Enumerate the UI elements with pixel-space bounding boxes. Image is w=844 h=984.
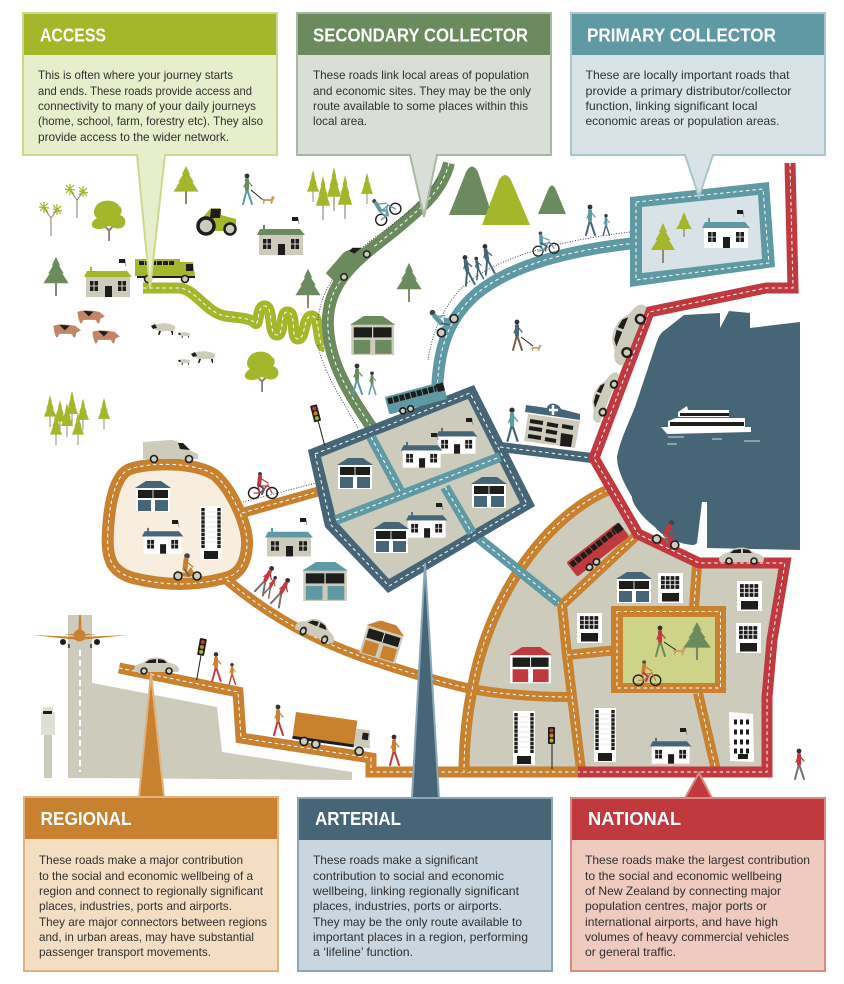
icon: red bus <box>566 522 631 579</box>
text block <box>39 853 267 959</box>
icon: person walking dog <box>513 320 542 351</box>
text block: to the social and economic wellbeing of a <box>39 869 253 883</box>
people and bikes <box>174 174 804 779</box>
icon: car <box>293 613 339 646</box>
panel: national <box>571 773 825 971</box>
road: secondary collector <box>318 163 449 428</box>
text block: important places in a region, performing <box>313 930 528 944</box>
text block: route available to some places within this <box>313 99 528 113</box>
text block: volumes of heavy commercial vehicles <box>585 930 789 944</box>
icon: parking building <box>200 506 222 560</box>
park with regional loop <box>611 606 726 693</box>
icon: lamb <box>178 332 190 338</box>
heading: NATIONAL <box>588 809 681 829</box>
road: access <box>143 288 325 347</box>
icon: cyclist red <box>248 472 278 498</box>
vehicles <box>134 208 764 757</box>
text block: wellbeing, linking regionally significant <box>312 884 520 898</box>
icon: pine cluster top <box>307 167 373 220</box>
icon: park tree <box>683 622 711 660</box>
text block: passenger transport movements. <box>39 945 211 959</box>
text block: places, industries, ports and airports. <box>39 899 232 913</box>
icon: office <box>577 613 602 643</box>
icon: traffic light <box>310 404 328 447</box>
icon: lime truck <box>135 259 195 282</box>
icon: pair orange <box>212 652 236 684</box>
text block <box>313 68 531 128</box>
icon: traffic light <box>193 638 207 681</box>
airport control tower <box>41 707 55 778</box>
text block: international airports, and have high <box>585 915 778 929</box>
icon: cyclist <box>364 189 403 228</box>
icon: house arterial <box>406 503 447 538</box>
icon: cow <box>92 330 120 343</box>
text block: These roads make the largest contribution <box>585 853 810 867</box>
icon: house primary <box>702 210 750 248</box>
icon: person walking dog <box>243 174 275 204</box>
roads: regional city network <box>464 490 716 772</box>
icon: red motorbike <box>652 516 686 550</box>
text block <box>586 68 792 128</box>
icon: tractor <box>198 208 236 234</box>
icon: pine lime <box>676 212 692 237</box>
text block: These roads make a significant <box>313 853 479 867</box>
traffic lights <box>193 404 555 769</box>
icon: plane <box>32 615 128 648</box>
text block: to the social and economic wellbeing <box>585 869 782 883</box>
icon: garage arterial <box>471 477 507 508</box>
icon: cyclist teal <box>530 229 560 257</box>
text block: region and connect to regionally significant <box>39 884 264 898</box>
road: regional ring with land <box>108 464 247 584</box>
road: arterial block with land <box>308 385 535 593</box>
icon: car <box>134 658 179 674</box>
icon: house national <box>650 728 691 764</box>
icon: pine lime <box>651 223 675 263</box>
text block: These roads link local areas of population <box>313 68 529 82</box>
panel: primary collector <box>571 13 825 197</box>
text block: provide access to the wider network. <box>38 130 229 144</box>
heading: SECONDARY COLLECTOR <box>313 26 528 46</box>
text block: population centres, major ports or <box>585 899 767 913</box>
icon: ferry <box>661 406 760 444</box>
text block: connectivity to many of your daily journeys <box>38 99 256 113</box>
icon: tower block <box>729 712 754 762</box>
icon: house teal <box>265 518 313 556</box>
text block: of New Zealand by connecting major <box>585 884 781 898</box>
icon: pine cluster left <box>44 391 110 445</box>
icon: house green roof <box>257 217 305 255</box>
icon: park cyclist <box>633 660 661 686</box>
airport runway and apron <box>68 615 352 780</box>
icon: parking building <box>594 708 616 762</box>
icon: traffic light <box>548 727 555 769</box>
road: primary collector <box>428 232 636 395</box>
road: regional main <box>227 580 570 697</box>
map illustration <box>32 163 804 780</box>
road: regional lower <box>119 668 578 772</box>
heading: REGIONAL <box>40 809 132 829</box>
icon: palm <box>39 202 62 236</box>
icon: lamb <box>178 359 190 365</box>
icon: hospital <box>524 404 580 448</box>
icon: garage city <box>616 572 652 603</box>
harbour water <box>617 311 800 550</box>
heading: ACCESS <box>40 26 106 46</box>
icon: teal bus <box>385 382 448 417</box>
icon: car upright <box>585 368 622 425</box>
icon: person orange <box>274 705 283 735</box>
text block <box>585 853 810 959</box>
icon: office <box>737 581 762 611</box>
heading: PRIMARY COLLECTOR <box>587 26 776 46</box>
text block: economic areas or population areas. <box>586 114 780 128</box>
icon: car harbour <box>719 548 764 564</box>
icon: green van <box>324 236 375 286</box>
road: national <box>578 163 793 772</box>
icon: round tree <box>92 201 125 241</box>
text block: These are locally important roads that <box>586 68 790 82</box>
text block: local area. <box>313 114 367 128</box>
icon: trio red <box>255 564 293 607</box>
panel: regional <box>24 673 278 971</box>
text block: and economic sites. They may be the only <box>313 84 531 98</box>
icon: garage arterial <box>337 458 373 489</box>
icon: office <box>736 623 761 653</box>
icon: cow <box>53 324 81 337</box>
text block: (home, school, farm, forestry etc). They also <box>38 114 263 128</box>
text block: and ends. These roads provide access and <box>38 84 252 98</box>
animals <box>53 310 215 365</box>
icon: palm <box>65 184 88 218</box>
road: teal link across <box>472 533 559 603</box>
panel: arterial <box>298 563 552 971</box>
icon: parking building <box>513 711 535 765</box>
text block <box>312 853 528 959</box>
city block land <box>464 490 785 772</box>
panel: access <box>23 13 277 289</box>
text block: places, industries, ports or airports. <box>313 899 502 913</box>
panel: secondary collector <box>297 13 551 217</box>
icon: garage red <box>509 647 552 683</box>
icon: person by hospital <box>508 407 518 441</box>
icon: person red <box>795 749 804 779</box>
text block: contribution to social and economic <box>313 869 504 883</box>
icon: person orange <box>390 735 399 765</box>
icon: pine green <box>43 257 69 296</box>
text block: These roads make a major contribution <box>39 853 243 867</box>
text block <box>38 68 263 144</box>
icon: car upright <box>603 298 650 368</box>
icon: teal motorbike <box>422 300 460 338</box>
trees <box>39 166 711 660</box>
icon: house lime roof <box>84 259 132 297</box>
icon: park walker with dog <box>656 626 686 656</box>
road: primary collector loop with land <box>630 182 775 287</box>
icon: cow <box>77 310 105 323</box>
icon: garage teal <box>302 562 348 601</box>
icon: house arterial <box>401 433 442 468</box>
icon: garage arterial <box>373 522 409 553</box>
icon: pair walking <box>586 205 610 235</box>
icon: orange truck <box>291 712 373 757</box>
text block: They may be the only route available to <box>313 915 522 929</box>
icon: office <box>658 573 683 603</box>
text block: or general traffic. <box>585 945 676 959</box>
heading: ARTERIAL <box>315 809 401 829</box>
text block: and, in urban areas, may have substantial <box>39 930 254 944</box>
icon: pair walking <box>353 364 376 394</box>
text block: This is often where your journey starts <box>38 68 233 82</box>
icon: pine green <box>295 269 321 308</box>
icon: garage ring <box>135 481 171 512</box>
icon: round tree <box>245 352 278 392</box>
icon: trio walking <box>461 243 495 286</box>
icon: white van <box>143 440 198 462</box>
icon: garage green <box>350 316 395 355</box>
icon: garage brown <box>358 617 407 664</box>
icon: sheep <box>191 351 215 363</box>
text block: a ‘lifeline’ function. <box>313 945 413 959</box>
icon: pine green <box>396 263 422 302</box>
text block: provide a primary distributor/collector <box>586 84 792 98</box>
icon: house arterial <box>436 418 477 454</box>
text block: They are major connectors between regions <box>39 915 267 929</box>
icon: pine lime <box>173 166 199 204</box>
road: ring link to arterial <box>242 483 320 513</box>
icon: sheep <box>151 323 175 335</box>
icon: house ring <box>142 520 183 554</box>
buildings <box>84 210 762 765</box>
text block: function, linking significant local <box>586 99 758 113</box>
mountains <box>449 166 566 225</box>
icon: motorbike ring <box>174 553 201 580</box>
road: arterial to national <box>500 447 592 458</box>
